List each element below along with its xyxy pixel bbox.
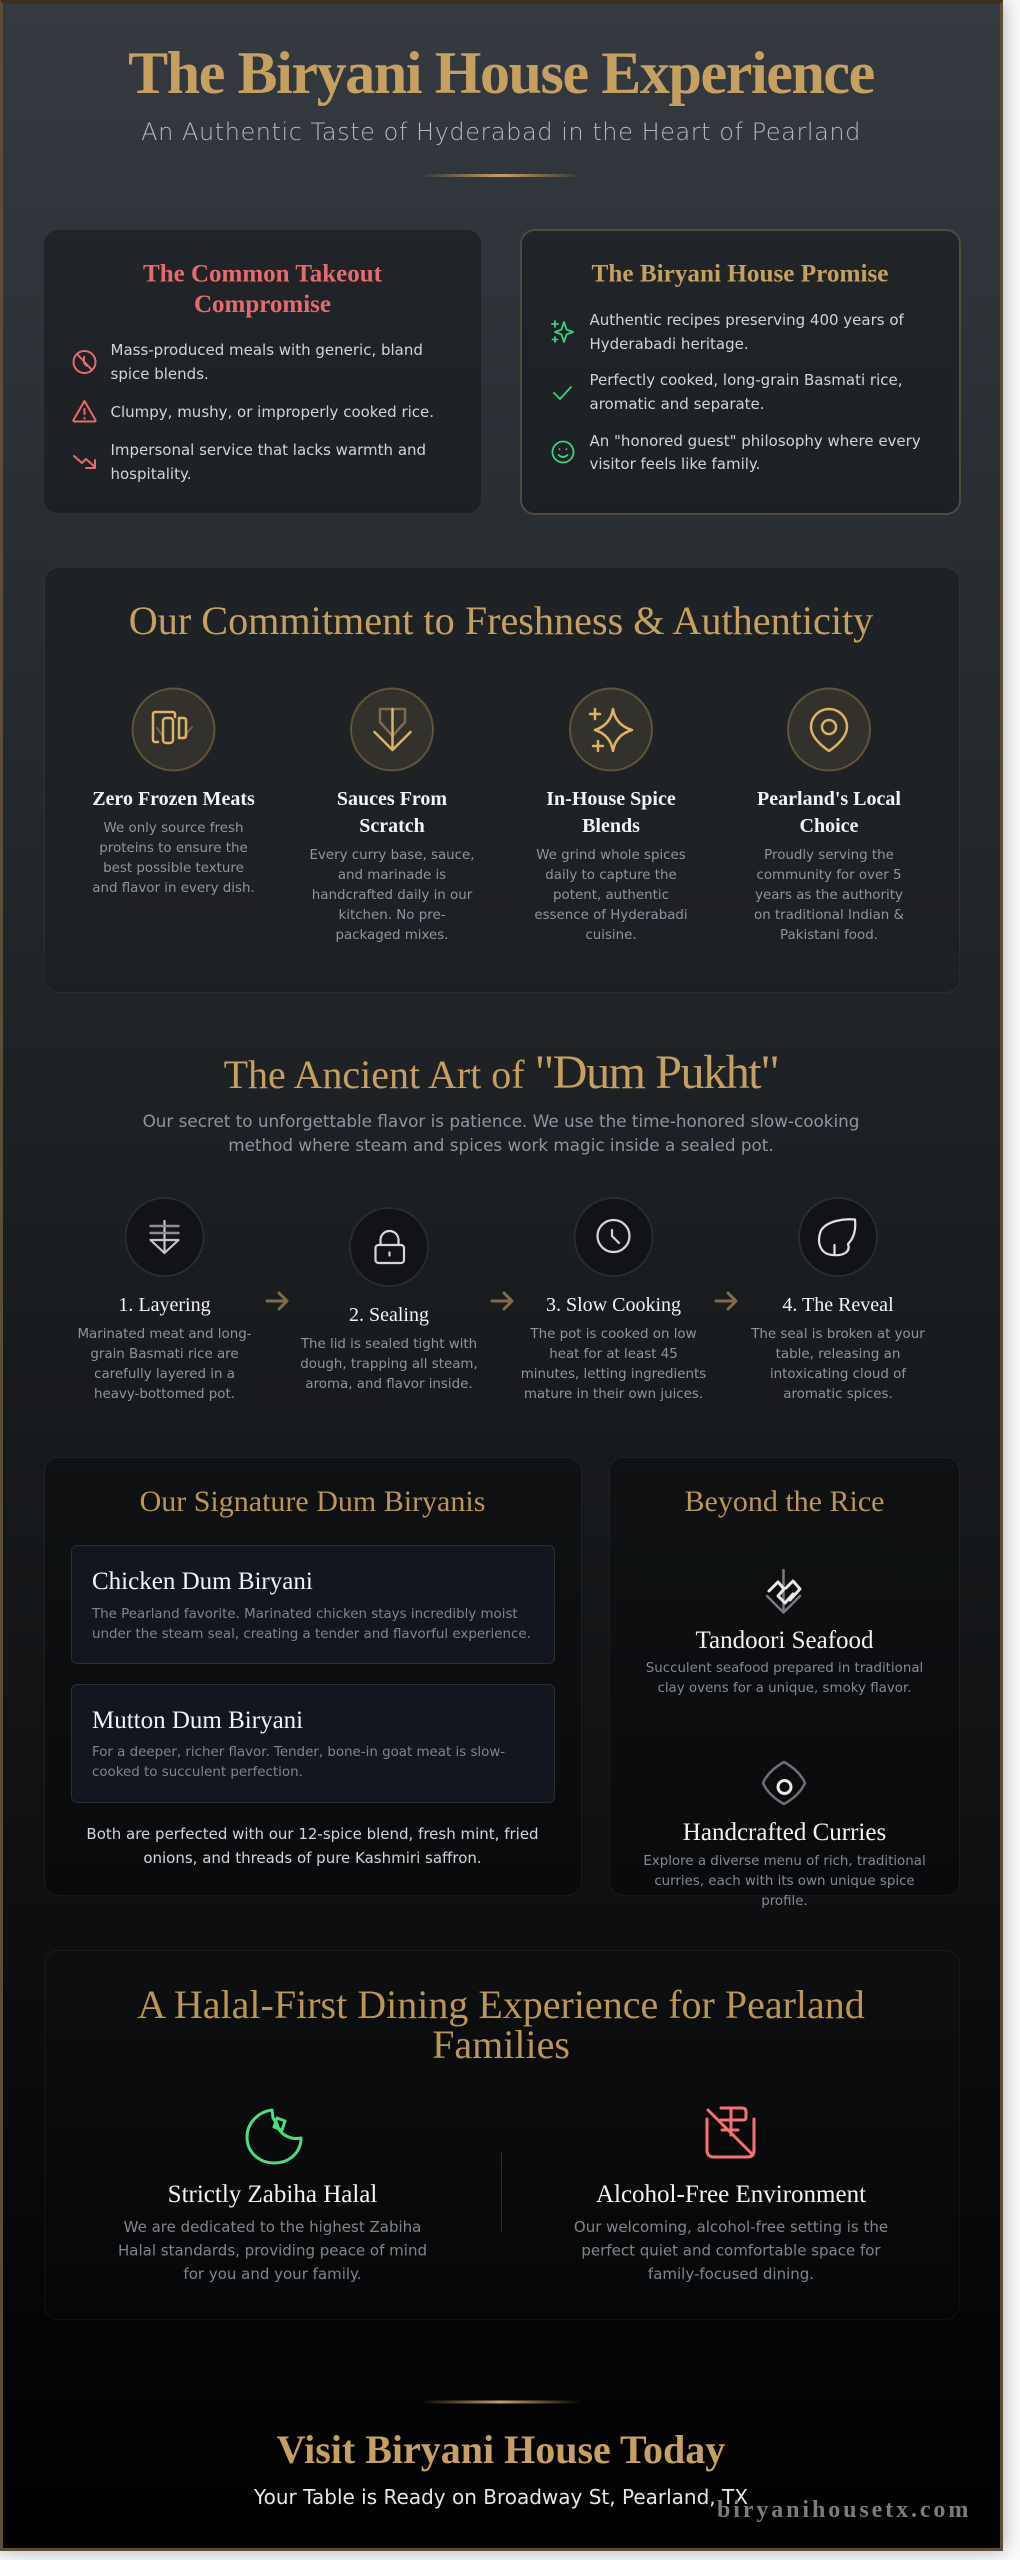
card: chicken dum biryani — [72, 1546, 554, 1664]
icon: warning — [73, 401, 96, 422]
description: Pakistani food. — [780, 928, 878, 943]
description: We grind whole spices — [536, 848, 686, 863]
label: Zero Frozen Meats — [92, 788, 255, 810]
description: Proudly serving the — [764, 848, 894, 863]
step 1: layering — [77, 1198, 252, 1402]
step description: aroma, and flavor inside. — [305, 1377, 473, 1392]
icon: sauces — [351, 688, 433, 770]
step description: dough, trapping all steam, — [300, 1357, 478, 1372]
header — [128, 40, 875, 177]
item: clumpy rice: Clumpy, mushy, or improperly cooked rice. — [110, 403, 434, 421]
heading: takeout compromise: The Common Takeout — [143, 260, 382, 288]
item: curries description: profile. — [761, 1894, 808, 1909]
description: for you and your family. — [183, 2265, 362, 2283]
panel: signature dum biryanis — [44, 1458, 582, 1896]
card description: under the steam seal, creating a tender and flavorful experience. — [92, 1627, 531, 1642]
description: community for over 5 — [756, 868, 902, 883]
divider — [501, 2152, 502, 2232]
heading: ancient art: The Ancient Art of "Dum Pukht" — [224, 1046, 778, 1099]
step description: The lid is sealed tight with — [301, 1337, 477, 1352]
description: years as the authority — [755, 888, 903, 903]
step description: grain Basmati rice are — [90, 1347, 239, 1362]
heading: promise: The Biryani House Promise — [592, 260, 888, 288]
heading: halal-first: Families — [432, 2022, 570, 2067]
panel: halal-first — [44, 1950, 960, 2320]
item: basmati rice: aromatic and separate. — [590, 395, 765, 413]
icon: reveal — [799, 1198, 877, 1276]
title: The Biryani House Experience — [128, 40, 875, 106]
icon: handcrafted curries — [763, 1762, 805, 1804]
description: potent, authentic — [553, 888, 669, 903]
title: Alcohol-Free Environment — [596, 2181, 866, 2208]
heading: halal-first: A Halal-First Dining Experience for Pearland — [137, 1982, 865, 2027]
step title: 2. Sealing — [349, 1304, 429, 1326]
heading: takeout compromise: Compromise — [194, 291, 331, 318]
icon: layers — [126, 1198, 204, 1276]
arrow 2 — [492, 1293, 512, 1309]
description: Every curry base, sauce, — [309, 848, 475, 863]
description: handcrafted daily in our — [312, 888, 473, 903]
item: honored guest: An "honored guest" philosophy where every — [590, 432, 921, 450]
item: generic meals: Mass-produced meals with generic, bland — [110, 341, 423, 359]
item: tandoori seafood description: Succulent seafood prepared in traditional — [646, 1661, 923, 1676]
description: We only source fresh — [104, 821, 243, 836]
arrow 1 — [267, 1293, 287, 1309]
footer — [253, 2400, 748, 2509]
intro text: Our secret to unforgettable flavor is patience. We use the time-honored slow-cooking — [143, 1111, 859, 1131]
address: Your Table is Ready on Broadway St, Pearland, TX — [253, 2485, 748, 2509]
subtitle: An Authentic Taste of Hyderabad in the Heart of Pearland — [141, 118, 861, 146]
step 3: slow cooking — [521, 1198, 706, 1402]
step description: The seal is broken at your — [751, 1327, 925, 1342]
description: daily to capture the — [545, 868, 677, 883]
item: tandoori seafood description: clay ovens for a unique, smoky flavor. — [657, 1681, 912, 1696]
panel: commitment to freshness — [44, 568, 960, 992]
intro text: method where steam and spices work magic inside a sealed pot. — [228, 1135, 774, 1155]
item: tandoori seafood title: Tandoori Seafood — [695, 1627, 874, 1654]
card description: The Pearland favorite. Marinated chicken stays incredibly moist — [92, 1607, 518, 1622]
card title: Chicken Dum Biryani — [92, 1568, 313, 1595]
description: best possible texture — [103, 861, 244, 876]
panel: the common takeout compromise — [44, 230, 481, 513]
description: on traditional Indian & — [754, 908, 905, 923]
description: and flavor in every dish. — [92, 881, 255, 896]
item: curries description: curries, each with its own unique spice — [654, 1874, 915, 1889]
label: In-House Spice — [546, 788, 676, 810]
description: family-focused dining. — [648, 2265, 814, 2283]
heading: signature biryanis: Our Signature Dum Biryanis — [140, 1485, 485, 1518]
heading: beyond the rice: Beyond the Rice — [685, 1485, 884, 1518]
card title: Mutton Dum Biryani — [92, 1707, 303, 1734]
step description: intoxicating cloud of — [770, 1367, 906, 1382]
panel: beyond the rice — [610, 1458, 960, 1909]
icon: clock — [574, 1198, 652, 1276]
item: impersonal service: Impersonal service that lacks warmth and — [110, 441, 426, 459]
icon: spice sparkle — [570, 688, 652, 770]
step 2: sealing — [300, 1208, 478, 1392]
step description: heat for at least 45 — [549, 1347, 678, 1362]
heading: visit: Visit Biryani House Today — [277, 2427, 725, 2472]
description: essence of Hyderabadi — [534, 908, 688, 923]
step description: carefully layered in a — [94, 1367, 235, 1382]
feature: in-house spice blends — [534, 688, 688, 943]
arrow 3 — [716, 1293, 736, 1309]
step title: 4. The Reveal — [782, 1294, 894, 1316]
watermark: biryanihousetx.com — [717, 2497, 971, 2523]
item: honored guest: visitor feels like family. — [590, 455, 760, 473]
icon: crescent — [247, 2110, 301, 2163]
note: spice blend: Both are perfected with our 12-spice blend, fresh mint, fried — [86, 1825, 539, 1843]
icon: lock — [350, 1208, 428, 1286]
feature: sauces from scratch — [309, 688, 475, 943]
icon: sparkles — [552, 321, 573, 342]
item: curries description: Explore a diverse menu of rich, traditional — [643, 1854, 926, 1869]
item: curries title: Handcrafted Curries — [683, 1819, 886, 1846]
icon: smile — [552, 442, 574, 462]
description: kitchen. No pre- — [338, 908, 446, 923]
icon: banned — [74, 351, 96, 373]
icon: tandoori seafood — [767, 1570, 800, 1612]
description: packaged mixes. — [335, 928, 449, 943]
item: authentic recipes: Hyderabadi heritage. — [590, 335, 749, 353]
card description: cooked to succulent perfection. — [92, 1765, 303, 1780]
label: Blends — [582, 815, 640, 837]
title: Strictly Zabiha Halal — [168, 2181, 377, 2208]
description: and marinade is — [338, 868, 446, 883]
step description: Marinated meat and long- — [77, 1327, 252, 1342]
header divider — [421, 174, 581, 177]
icon: frozen meats — [132, 688, 214, 770]
label: Choice — [800, 815, 859, 837]
block: alcohol-free — [574, 2108, 888, 2283]
icon: location pin — [788, 688, 870, 770]
icon: trending down — [74, 456, 95, 468]
feature: zero frozen meats — [92, 688, 255, 896]
label: Scratch — [359, 815, 425, 837]
step description: mature in their own juices. — [524, 1387, 703, 1402]
step description: heavy-bottomed pot. — [94, 1387, 235, 1402]
section: dum pukht — [77, 1046, 925, 1402]
icon: no alcohol — [707, 2108, 754, 2157]
heading: commitment: Our Commitment to Freshness & Authenticity — [129, 598, 873, 643]
label: Sauces From — [337, 788, 447, 810]
footer divider — [421, 2400, 581, 2404]
description: perfect quiet and comfortable space for — [581, 2242, 881, 2260]
description: proteins to ensure the — [99, 841, 248, 856]
description: cuisine. — [585, 928, 637, 943]
block: zabiha halal — [118, 2110, 427, 2283]
note: spice blend: onions, and threads of pure Kashmiri saffron. — [143, 1849, 482, 1867]
item: basmati rice: Perfectly cooked, long-grain Basmati rice, — [590, 371, 903, 389]
description: Our welcoming, alcohol-free setting is the — [574, 2218, 888, 2236]
item: impersonal service: hospitality. — [110, 465, 191, 483]
step title: 1. Layering — [118, 1294, 211, 1316]
card description: For a deeper, richer flavor. Tender, bone-in goat meat is slow- — [92, 1745, 505, 1760]
step description: The pot is cooked on low — [530, 1327, 697, 1342]
step description: table, releasing an — [776, 1347, 900, 1362]
label: Pearland's Local — [757, 788, 901, 810]
description: Halal standards, providing peace of mind — [118, 2242, 427, 2260]
description: We are dedicated to the highest Zabiha — [124, 2218, 421, 2236]
step title: 3. Slow Cooking — [546, 1294, 681, 1316]
step description: aromatic spices. — [783, 1387, 893, 1402]
item: authentic recipes: Authentic recipes preserving 400 years of — [590, 311, 904, 329]
step 4: the reveal — [750, 1198, 925, 1402]
icon: check — [554, 387, 571, 399]
item: generic meals: spice blends. — [110, 365, 209, 383]
feature: local choice — [754, 688, 905, 943]
panel: the biryani house promise — [521, 230, 960, 514]
card: mutton dum biryani — [72, 1684, 554, 1802]
step description: minutes, letting ingredients — [521, 1367, 706, 1382]
